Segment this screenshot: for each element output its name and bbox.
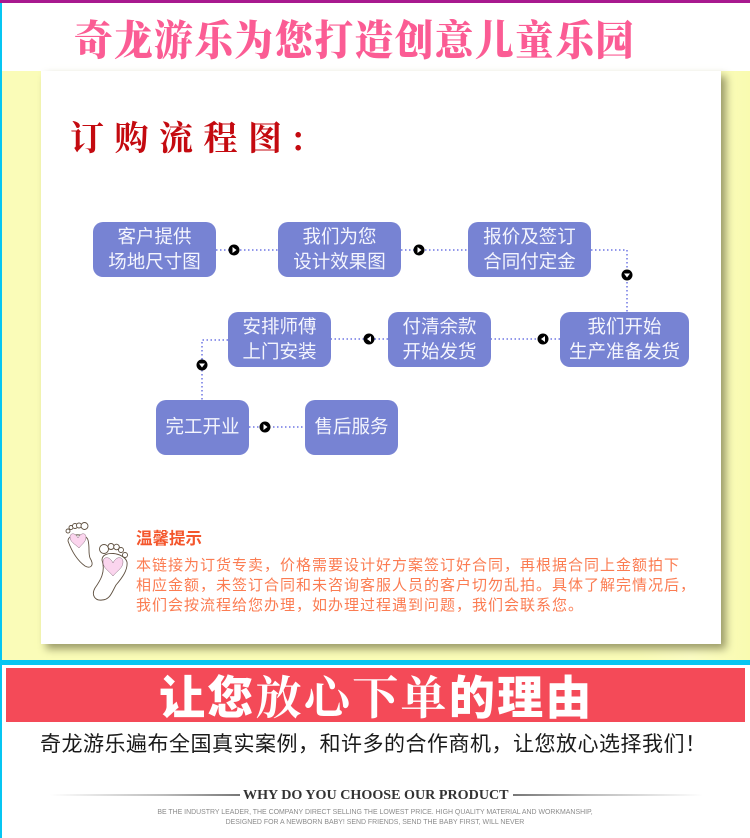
step 7: 完工开业 [165,416,240,437]
tip text: 我们会按流程给您办理，如办理过程遇到问题，我们会联系您。 [136,597,584,614]
tip text: 相应金额，未签订合同和未咨询客服人员的客户切勿乱拍。具体了解完情况后， [136,577,696,594]
step 4 [560,312,689,367]
top purple bar [0,0,750,3]
step 6: 安排师傅 [242,316,316,337]
cyan divider band [0,660,750,665]
step 3 [468,222,591,277]
banner title: 让您放心下单的理由 [159,662,594,728]
english heading: WHY DO YOU CHOOSE OUR PRODUCT [243,787,509,803]
step 1: 场地尺寸图 [108,250,201,272]
tip text: 本链接为订货专卖，价格需要设计好方案签订好合同，再根据合同上金额拍下 [136,556,680,574]
english body text: BE THE INDUSTRY LEADER, THE COMPANY DIRECT SELLING THE LOWEST PRICE. HIGH QUALITY MATERIAL AND WORKMANSHIP, [157,808,593,816]
tip text [136,556,696,614]
step 2: 设计效果图 [293,250,386,272]
yellow background panel [2,71,750,660]
step 2 [278,222,401,277]
left rule [50,794,240,796]
step 3: 报价及签订 [483,226,576,247]
heading: order process: 订购流程图: [70,111,314,160]
left cyan edge [0,3,2,838]
right rule [513,794,703,796]
tip heading: 温馨提示 [136,530,202,548]
red banner [6,668,745,722]
main title: 奇龙游乐为您打造创意儿童乐园 [74,9,635,68]
step 3: 合同付定金 [483,250,576,272]
step 7 [156,400,249,455]
step 8: 售后服务 [314,416,388,437]
step 4: 生产准备发货 [569,340,680,362]
step 1 [93,222,216,277]
step 2: 我们为您 [302,226,376,247]
subheading: 奇龙游乐遍布全国真实案例，和许多的合作商机，让您放心选择我们！ [40,732,706,756]
step 5 [388,312,491,367]
step 5: 付清余款 [402,316,476,337]
step 5: 开始发货 [402,340,476,362]
step 1: 客户提供 [117,226,192,247]
english body text: DESIGNED FOR A NEWBORN BABY! SEND FRIENDS, SEND THE BABY FIRST, WILL NEVER [226,818,524,826]
english body text [157,808,593,826]
step 6 [228,312,331,367]
step 4: 我们开始 [587,316,662,337]
icon: footprints [66,522,128,601]
step 8 [305,400,398,455]
white card panel [41,71,721,644]
step 6: 上门安装 [242,340,316,362]
